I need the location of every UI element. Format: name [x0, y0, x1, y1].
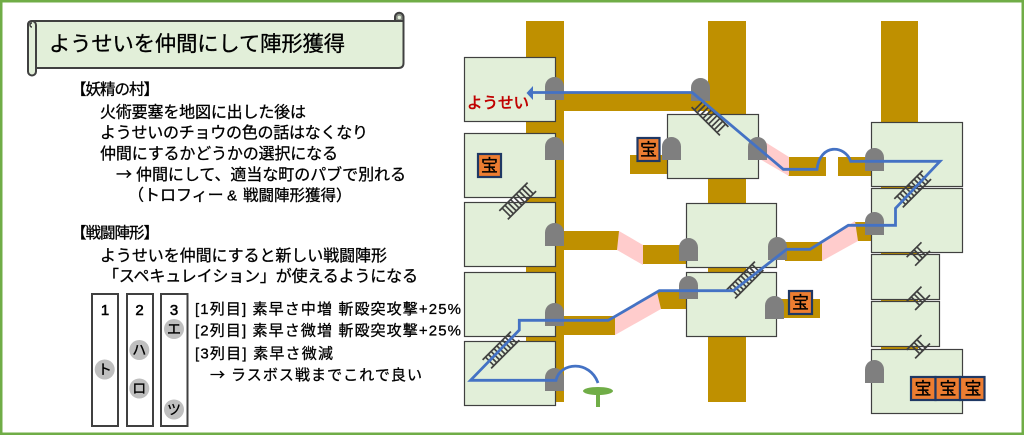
text block: battle formation: 【戦闘陣形】: [71, 224, 159, 242]
column 3: ツ: [167, 402, 181, 418]
map: corridors: [526, 21, 918, 402]
column 3: エ: [167, 321, 181, 337]
formation stats text: [1列目] 素早さ中増 斬殴突攻撃+25%: [195, 301, 461, 318]
text block: fairy village: ようせいのチョウの色の話はなくなり: [100, 124, 368, 142]
formation stats text: [3列目] 素早さ微減: [195, 346, 333, 362]
icon: green mushroom: [583, 387, 613, 407]
title text: ようせいを仲間にして陣形獲得: [49, 32, 345, 56]
map: pink slopes: [615, 142, 858, 335]
title scroll banner: [28, 13, 404, 76]
formation stats text: [195, 301, 461, 385]
column 1: 1: [101, 302, 109, 319]
column 1: ト: [98, 362, 112, 378]
text block: fairy village: 火術要塞を地図に出した後は: [100, 104, 306, 122]
map: treasure boxes: 宝: [940, 380, 956, 398]
text block: fairy village: 戦闘陣形獲得）: [243, 186, 352, 204]
map: treasure boxes: 宝: [792, 294, 809, 312]
formation diagram: [92, 294, 188, 426]
text block: fairy village: 仲間にするかどうかの選択になる: [100, 145, 338, 163]
map: doors: [545, 77, 884, 391]
column 3: [161, 294, 188, 426]
column 2: ロ: [132, 380, 146, 396]
map: rooms: [464, 58, 962, 414]
text block: battle formation: ようせいを仲間にすると新しい戦闘陣形: [100, 247, 387, 265]
label: fairy: ようせい: [467, 95, 529, 112]
text block: battle formation: [71, 224, 418, 286]
column 3: 3: [170, 302, 178, 319]
map: treasure boxes: 宝: [481, 156, 498, 176]
text block: fairy village: →: [116, 161, 132, 185]
column 2: [127, 294, 153, 426]
formation stats text: ラスボス戦までこれで良い: [231, 367, 422, 384]
formation stats text: →: [210, 364, 225, 385]
text block: fairy village: &: [227, 188, 237, 204]
map: treasure boxes: 宝: [964, 380, 982, 398]
map: ladders: [483, 99, 931, 368]
column 2: 2: [135, 302, 144, 319]
map: treasure boxes: 宝: [914, 380, 932, 398]
route line with arrow: [470, 86, 940, 383]
text block: fairy village: （トロフィー: [128, 186, 224, 204]
map: treasure boxes: 宝: [640, 140, 657, 160]
map: treasure boxes: [478, 138, 984, 400]
column 2: ハ: [132, 342, 146, 358]
text block: battle formation: 「スペキュレイション」が使えるようになる: [103, 268, 418, 286]
formation stats text: [2列目] 素早さ微増 斬殴突攻撃+25%: [195, 322, 461, 340]
text block: fairy village: 仲間にして、適当な町のパブで別れる: [136, 165, 406, 184]
text block: fairy village: 【妖精の村】: [71, 80, 159, 98]
text block: fairy village: [71, 80, 406, 204]
column 1: [92, 294, 118, 426]
